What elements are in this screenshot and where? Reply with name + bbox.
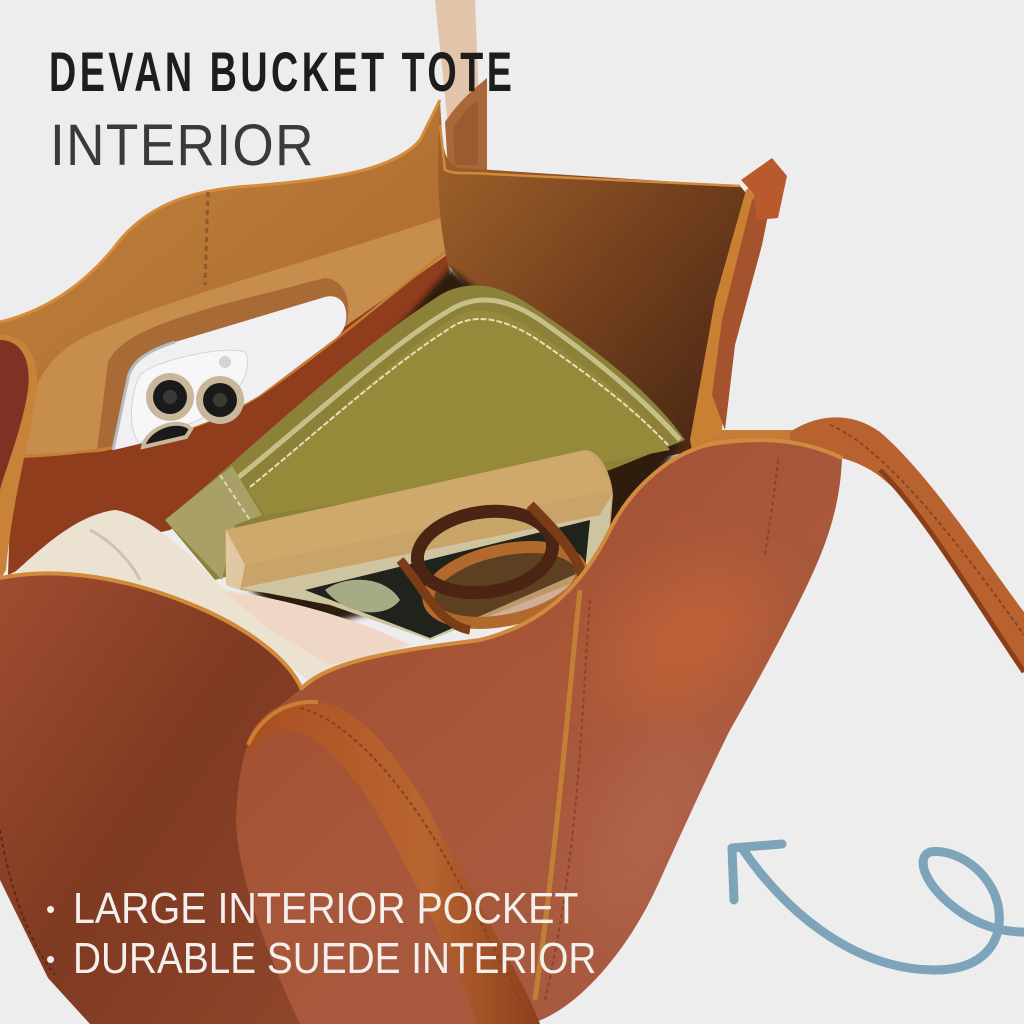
- feature list: [46, 884, 596, 983]
- interior pocket panel: [20, 218, 447, 455]
- feature: durable suede interior: •: [46, 944, 55, 974]
- curly blue arrow pointing up-left: [732, 844, 1024, 970]
- smartphone in pocket: [113, 296, 346, 450]
- back right suede wall: [438, 110, 830, 470]
- back left suede wall: [0, 100, 450, 470]
- left side flap: [0, 335, 37, 580]
- pocket leather front: [8, 252, 450, 575]
- bag front right panel: [200, 440, 842, 1024]
- cream fabric scarf: [15, 510, 410, 690]
- feature: large interior pocket: •: [46, 894, 55, 924]
- feature: durable suede interior: DURABLE SUEDE INTERIOR: [73, 934, 596, 983]
- amber tortoise hair claw: [400, 503, 589, 635]
- right shoulder strap: [790, 417, 1024, 672]
- near shoulder strap: [248, 701, 540, 1024]
- feature: large interior pocket: LARGE INTERIOR POCKET: [73, 884, 578, 933]
- bag front left panel: [0, 573, 302, 1024]
- dark bag interior: [190, 268, 680, 630]
- subtitle: INTERIOR: [50, 113, 315, 178]
- olive green notebook wallet: [165, 285, 685, 580]
- title: DEVAN BUCKET TOTE: [49, 40, 515, 103]
- old hardcover book: [225, 450, 613, 640]
- far strap rising behind the bag: [435, 0, 487, 170]
